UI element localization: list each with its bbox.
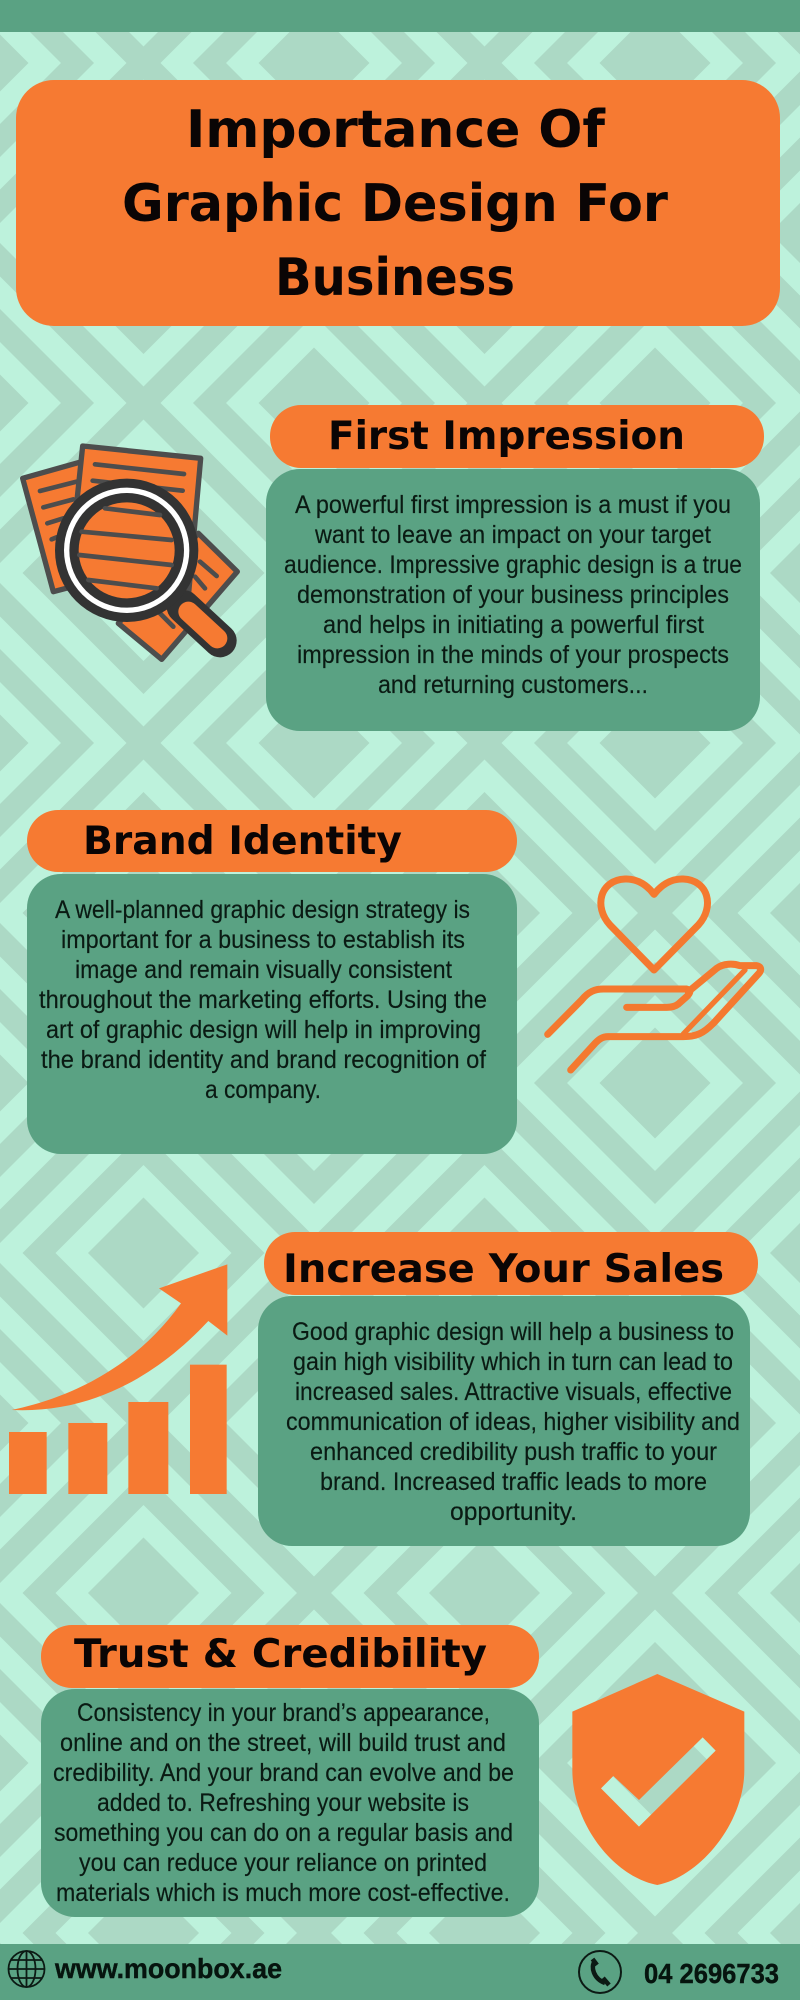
text card: trust and credibility: Consistency in your brand’s appearance, <box>77 1699 490 1727</box>
website address: www.moonbox.ae <box>54 1953 282 1984</box>
text card: brand identity: the brand identity and brand recognition of <box>41 1046 486 1074</box>
title <box>122 100 668 308</box>
text card: trust and credibility: something you can do on a regular basis and <box>54 1819 513 1847</box>
pill heading: trust and credibility <box>41 1625 539 1688</box>
text card: first impression: audience. Impressive graphic design is a true <box>284 551 742 579</box>
title: Graphic Design For <box>122 174 668 234</box>
top band <box>0 0 800 32</box>
text card: increase your sales: gain high visibility which in turn can lead to <box>293 1348 733 1376</box>
text card: first impression: and returning customers... <box>378 671 648 699</box>
text card: increase your sales: communication of ideas, higher visibility and <box>286 1408 740 1436</box>
text card: trust and credibility: online and on the street, will build trust and <box>60 1729 506 1757</box>
text card: brand identity: image and remain visually consistent <box>75 956 452 984</box>
icon: globe <box>8 1951 44 1987</box>
pill heading: brand identity: Brand Identity <box>83 819 402 864</box>
panel: first impression <box>266 405 764 731</box>
panel: brand identity <box>27 810 517 1154</box>
text card: first impression: A powerful first impression is a must if you <box>295 491 731 519</box>
icon: phone <box>579 1951 621 1993</box>
pill heading: trust and credibility: Trust & Credibility <box>74 1632 487 1677</box>
text card: trust and credibility: materials which is much more cost-effective. <box>56 1879 510 1907</box>
icon: rising bar chart with arrow <box>9 1264 227 1494</box>
title panel <box>16 80 780 326</box>
text card: increase your sales: increased sales. Attractive visuals, effective <box>295 1378 732 1406</box>
text card: brand identity <box>27 874 517 1154</box>
pill heading: increase your sales: Increase Your Sales <box>283 1247 724 1292</box>
text card: increase your sales: opportunity. <box>450 1498 577 1526</box>
text card: increase your sales: Good graphic design will help a business to <box>292 1318 734 1346</box>
panel: increase your sales <box>258 1232 758 1546</box>
text card: first impression: impression in the minds of your prospects <box>297 641 729 669</box>
footer band <box>0 1944 800 2000</box>
text card: first impression: demonstration of your business principles <box>297 581 729 609</box>
title: Importance Of <box>186 100 606 160</box>
pill heading: first impression: First Impression <box>328 414 685 459</box>
text card: brand identity: art of graphic design will help in improving <box>46 1016 481 1044</box>
text card: brand identity: throughout the marketing efforts. Using the <box>39 986 487 1014</box>
text card: increase your sales: brand. Increased traffic leads to more <box>320 1468 707 1496</box>
panel: trust and credibility <box>41 1625 539 1917</box>
text card: increase your sales: enhanced credibility push traffic to your <box>310 1438 717 1466</box>
pill heading: increase your sales <box>264 1232 758 1295</box>
text card: trust and credibility: you can reduce your reliance on printed <box>79 1849 487 1877</box>
pill heading: first impression <box>270 405 764 468</box>
title: Business <box>275 248 515 308</box>
text card: brand identity: A well-planned graphic design strategy is <box>55 896 470 924</box>
text card: first impression: and helps in initiating a powerful first <box>323 611 704 639</box>
text card: trust and credibility: added to. Refreshing your website is <box>97 1789 469 1817</box>
text card: first impression <box>266 469 760 731</box>
icon: documents under magnifying glass <box>23 446 237 659</box>
text card: brand identity: important for a business to establish its <box>61 926 465 954</box>
text card: first impression: want to leave an impact on your target <box>314 521 711 549</box>
icon: heart over open hand <box>548 879 761 1070</box>
text card: trust and credibility: credibility. And your brand can evolve and be <box>53 1759 514 1787</box>
text card: increase your sales <box>258 1296 750 1546</box>
icon: shield with check mark <box>572 1674 744 1885</box>
phone number: 04 2696733 <box>644 1958 779 1989</box>
text card: trust and credibility <box>41 1689 539 1917</box>
pill heading: brand identity <box>27 810 517 872</box>
text card: brand identity: a company. <box>205 1076 321 1104</box>
